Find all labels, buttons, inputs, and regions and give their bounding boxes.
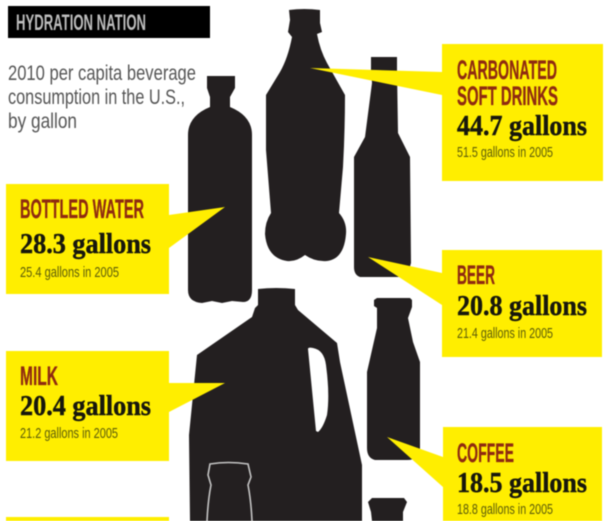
callout: beer: 20.8 gallons [457,291,587,322]
callout: carbonated soft drinks [310,44,603,181]
icon: coffee bottle [367,298,420,460]
description text: 2010 per capita beverage [8,62,196,85]
callout: carbonated soft drinks: 51.5 gallons in 2005 [457,145,553,161]
icon: milk jug [189,288,362,521]
icon: beer bottle [354,57,411,277]
callout: cut-off box at bottom [6,517,169,521]
description text: consumption in the U.S., [8,86,185,109]
callout: beer: 21.4 gallons in 2005 [457,326,553,342]
icon: soda bottle [265,9,346,261]
callout: beer: BEER [457,260,495,290]
icon: water bottle [188,76,252,303]
callout: milk [6,351,225,461]
callout: coffee: COFFEE [457,438,514,468]
callout: coffee: 18.8 gallons in 2005 [457,502,553,518]
callout: milk: 21.2 gallons in 2005 [20,426,118,442]
callout: beer [368,250,602,357]
callout: milk: 20.4 gallons [20,391,151,422]
icon: partial bottle at bottom [368,498,407,521]
callout: bottled water: 25.4 gallons in 2005 [20,265,119,281]
callout: milk: MILK [20,361,58,391]
callout: carbonated soft drinks: 44.7 gallons [457,111,587,142]
callout: coffee [387,427,602,521]
header bar [8,6,210,38]
icon: outlined bottle inside jug [207,462,252,521]
header bar: HYDRATION NATION [16,10,146,35]
callout: bottled water: BOTTLED WATER [20,194,144,224]
description text [8,62,196,133]
callout: bottled water: 28.3 gallons [20,229,151,260]
callout: coffee: 18.5 gallons [457,468,587,499]
callout: bottled water [6,184,225,294]
description text: by gallon [8,110,77,133]
